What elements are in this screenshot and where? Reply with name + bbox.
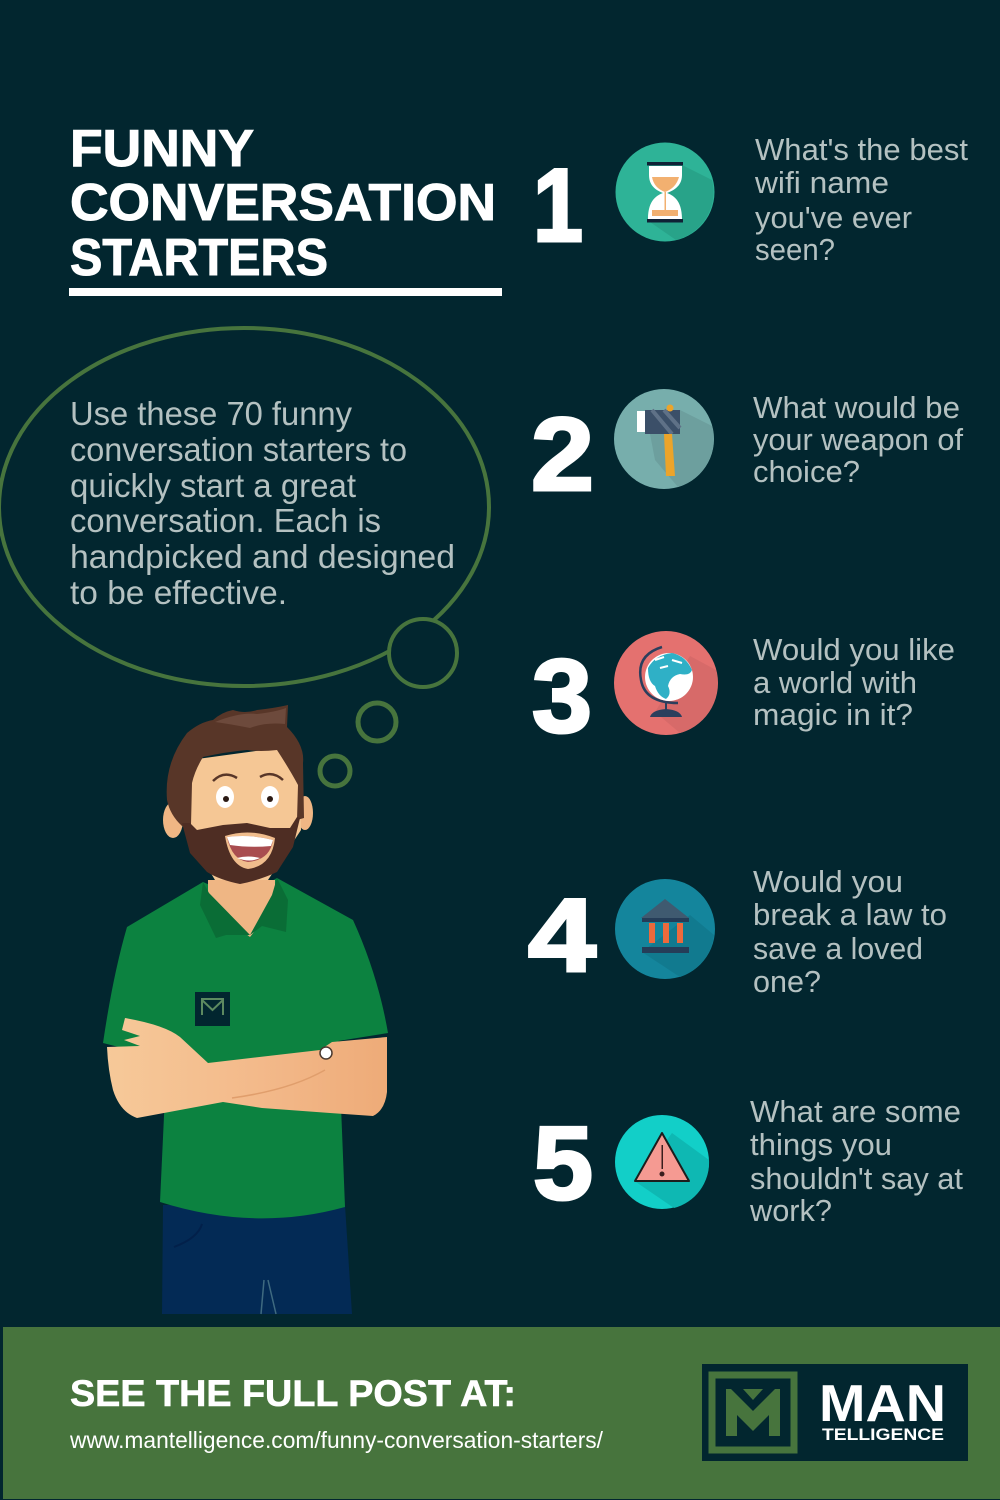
item 4: number, icon and question: break a law to	[753, 897, 947, 932]
footer call to action: www.mantelligence.com/funny-conversation-starters/	[69, 1427, 604, 1453]
icon: hammer	[614, 389, 714, 489]
icon: courthouse	[615, 879, 715, 979]
item 3: number, icon and question: magic in it?	[753, 697, 913, 732]
illustration: smiling bearded man	[103, 705, 388, 1314]
title: FUNNY	[70, 120, 254, 178]
logo: Mantelligence: MAN	[819, 1375, 946, 1433]
logo: Mantelligence: TELLIGENCE	[822, 1425, 944, 1444]
item 5: number, icon and question: What are some	[750, 1094, 961, 1129]
item 3: number, icon and question	[532, 631, 955, 755]
item 5: number, icon and question: shouldn't say at	[750, 1161, 963, 1196]
intro text: Use these 70 funny	[70, 395, 352, 432]
item 2: number, icon and question	[531, 389, 963, 513]
item 3: number, icon and question: Would you like	[753, 632, 955, 667]
icon: hourglass: wifi name	[754, 165, 889, 200]
item 2: number, icon and question: 2	[531, 397, 594, 513]
item 1: number, icon and question	[533, 132, 968, 267]
icon: hourglass: seen?	[755, 232, 835, 267]
footer band	[3, 1327, 1000, 1499]
item 5: number, icon and question: work?	[749, 1193, 832, 1228]
icon: globe	[614, 631, 718, 735]
icon: hourglass	[616, 132, 968, 267]
icon: warning triangle	[615, 1115, 709, 1209]
item 4: number, icon and question: save a loved	[753, 931, 923, 966]
title: CONVERSATION	[70, 174, 496, 232]
icon: hourglass: What's the best	[755, 132, 968, 167]
footer call to action: SEE THE FULL POST AT:	[70, 1373, 516, 1414]
item 4: number, icon and question: one?	[753, 964, 821, 999]
title	[69, 120, 502, 296]
item 4: number, icon and question: Would you	[753, 864, 903, 899]
item 5: number, icon and question: things you	[750, 1127, 892, 1162]
item 4: number, icon and question: 4	[528, 878, 596, 994]
item 2: number, icon and question: your weapon of	[753, 422, 963, 457]
intro text	[70, 395, 455, 611]
logo: Mantelligence	[702, 1364, 968, 1461]
intro text: to be effective.	[70, 574, 287, 611]
item 3: number, icon and question: 3	[532, 639, 592, 755]
item 4: number, icon and question	[528, 864, 947, 999]
intro text: quickly start a great	[70, 467, 356, 504]
item 2: number, icon and question: What would be	[753, 390, 960, 425]
intro text: handpicked and designed	[70, 538, 455, 575]
intro text: conversation. Each is	[70, 502, 381, 539]
item 5: number, icon and question	[533, 1094, 963, 1228]
footer call to action	[69, 1373, 604, 1453]
item 3: number, icon and question: a world with	[753, 665, 917, 700]
thought bubble	[0, 328, 489, 786]
icon: hourglass: you've ever	[755, 200, 912, 235]
item 2: number, icon and question: choice?	[753, 454, 860, 489]
intro text: conversation starters to	[70, 431, 407, 468]
item 5: number, icon and question: 5	[533, 1106, 593, 1222]
item 1: number, icon and question: 1	[533, 148, 583, 264]
title: STARTERS	[70, 229, 328, 287]
